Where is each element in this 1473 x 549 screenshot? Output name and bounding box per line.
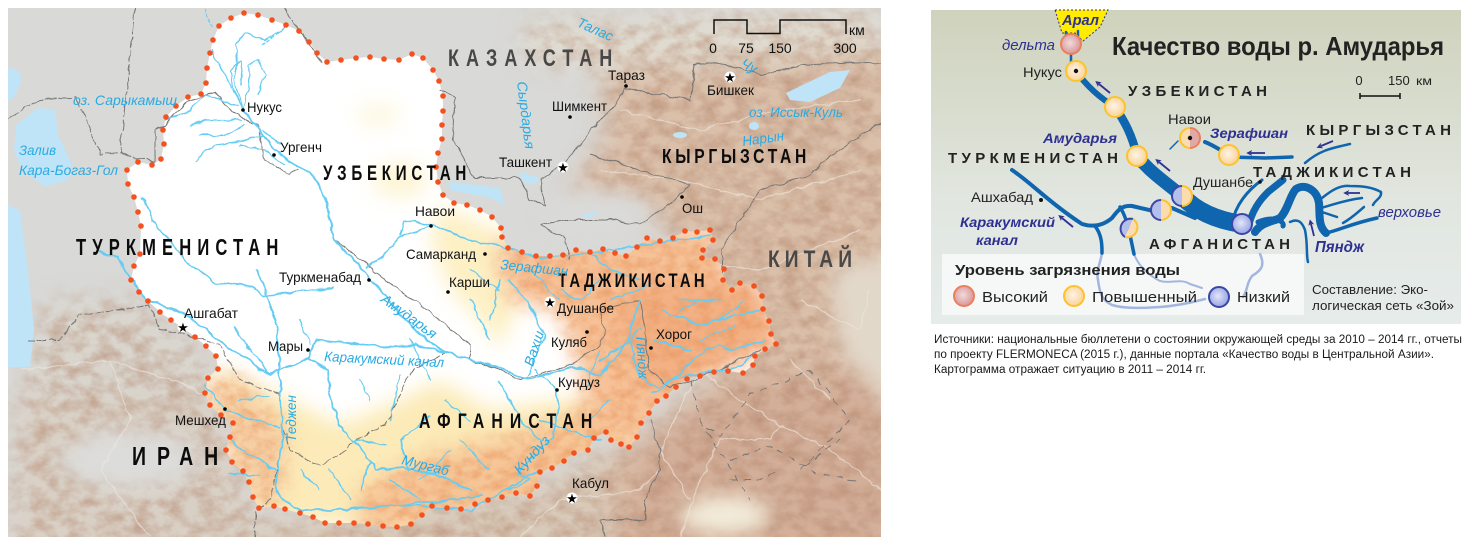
panel: water quality schematic bbox=[931, 10, 1461, 324]
capital city stars: ★ bbox=[724, 70, 736, 85]
schematic place labels: Арал bbox=[1061, 12, 1100, 29]
capital city stars: ★ bbox=[566, 491, 578, 506]
country labels on the map: АФГАНИСТАН bbox=[419, 409, 592, 433]
country labels on the map: УЗБЕКИСТАН bbox=[323, 160, 466, 185]
city labels: Самарканд bbox=[406, 246, 476, 262]
schematic scale bar: 0 bbox=[1355, 73, 1363, 88]
country labels on the map bbox=[76, 46, 852, 471]
schematic place labels: Каракумский bbox=[960, 214, 1055, 230]
basin area tinted by elevation bbox=[127, 14, 775, 527]
country labels on the map: ИРАН bbox=[132, 441, 218, 471]
credit: compiled by Zoi Environment Network: логическая сеть «Зой» bbox=[1312, 299, 1454, 313]
schematic place labels: УЗБЕКИСТАН bbox=[1128, 83, 1267, 100]
river and lake labels: Кара-Богаз-Гол bbox=[19, 162, 118, 178]
river and lake labels: Талас bbox=[575, 14, 616, 44]
legend: pollution level: Уровень загрязнения воды bbox=[955, 262, 1180, 279]
schematic place labels: Навои bbox=[1168, 111, 1211, 127]
schematic place labels: Амударья bbox=[1042, 130, 1117, 146]
river and lake labels: оз. Сарыкамыш bbox=[73, 92, 177, 108]
schematic scale bar: км bbox=[1416, 74, 1432, 88]
schematic place labels: ТАДЖИКИСТАН bbox=[1253, 164, 1411, 181]
city labels: Куляб bbox=[551, 334, 587, 350]
map scale bar: км bbox=[849, 22, 865, 38]
sources note: Источники: национальные бюллетени о состоянии окружающей среды за 2010 – 2014 гг., отчеты bbox=[934, 334, 1462, 346]
river and lake labels: Кундуз bbox=[510, 432, 553, 477]
river and lake labels: Чу bbox=[738, 55, 761, 77]
river and lake labels bbox=[19, 14, 843, 479]
schematic place labels: АФГАНИСТАН bbox=[1149, 236, 1290, 253]
map scale bar: 150 bbox=[768, 40, 792, 56]
surrounding terrain relief bbox=[8, 8, 900, 549]
city labels: Ош bbox=[682, 200, 703, 216]
flow direction arrows bbox=[1062, 84, 1360, 236]
country labels on the map: ТУРКМЕНИСТАН bbox=[76, 235, 278, 261]
legend box background bbox=[942, 254, 1304, 315]
water bodies: Caspian, Kara-Bogaz-Gol and mountain lakes bbox=[8, 68, 850, 367]
sources note: по проекту FLERMONECA (2015 г.), данные портала «Качество воды в Центральной Азии». bbox=[934, 349, 1434, 361]
city labels: Навои bbox=[415, 203, 455, 219]
country labels on the map: КАЗАХСТАН bbox=[448, 46, 612, 72]
schematic place labels: Нукус bbox=[1023, 64, 1062, 80]
map scale bar bbox=[709, 20, 865, 56]
river and lake labels: Пяндж bbox=[633, 336, 652, 380]
city labels: Шимкент bbox=[552, 98, 608, 114]
city labels: Хорог bbox=[656, 326, 692, 342]
city labels: Мары bbox=[268, 338, 303, 354]
schematic place labels: Ашхабад bbox=[971, 189, 1033, 205]
river and lake labels: Каракумский канал bbox=[324, 348, 445, 370]
monitoring points coloured by pollution level bbox=[1039, 34, 1262, 237]
schematic place labels: верховье bbox=[1378, 204, 1441, 221]
sources note bbox=[934, 334, 1462, 376]
river and lake labels: Мургаб bbox=[400, 451, 452, 479]
city labels: Нукус bbox=[247, 99, 282, 115]
river and lake labels: Вахш bbox=[521, 328, 547, 368]
city labels: Ашгабат bbox=[184, 305, 239, 321]
country labels on the map: КЫРГЫЗСТАН bbox=[662, 145, 806, 167]
river and lake labels: Нарын bbox=[741, 127, 785, 149]
country borders bbox=[8, 8, 881, 537]
Aral Sea in yellow bbox=[1055, 10, 1108, 41]
title: Качество воды р. Амударья bbox=[1112, 31, 1444, 61]
river and lake labels: Сырдарья bbox=[514, 80, 538, 150]
city labels: Бишкек bbox=[707, 82, 755, 98]
river and lake labels: Залив bbox=[19, 142, 56, 158]
city labels: Мешхед bbox=[175, 412, 226, 428]
map scale bar: 0 bbox=[709, 40, 717, 56]
city labels: Ургенч bbox=[280, 139, 322, 155]
legend: pollution level: Низкий bbox=[1237, 289, 1290, 306]
legend: pollution level bbox=[954, 262, 1290, 307]
schematic place labels: Пяндж bbox=[1315, 239, 1365, 256]
capital city stars: ★ bbox=[177, 320, 189, 335]
schematic place labels bbox=[948, 12, 1451, 256]
legend: pollution level: Высокий bbox=[982, 289, 1048, 306]
city markers bbox=[223, 84, 684, 411]
capital city stars bbox=[177, 70, 736, 506]
city labels: Ташкент bbox=[499, 154, 553, 170]
schematic place labels: дельта bbox=[1002, 37, 1055, 54]
schematic place labels: КЫРГЫЗСТАН bbox=[1306, 122, 1451, 139]
capital city stars: ★ bbox=[544, 295, 556, 310]
schematic place labels: ТУРКМЕНИСТАН bbox=[948, 150, 1118, 167]
credit: compiled by Zoi Environment Network bbox=[1312, 283, 1454, 313]
sources note: Картограмма отражает ситуацию в 2011 – 2014 гг. bbox=[934, 364, 1206, 376]
schematic place labels: Зерафшан bbox=[1210, 125, 1289, 141]
city labels: Кундуз bbox=[558, 374, 600, 390]
city labels: Кабул bbox=[572, 475, 609, 491]
river and lake labels: оз. Иссык-Куль bbox=[749, 104, 843, 120]
valleys in the surrounding relief bbox=[20, 100, 881, 537]
city labels: Карши bbox=[449, 274, 490, 290]
river and lake labels: Амударья bbox=[377, 290, 441, 342]
river network scheme bbox=[1012, 31, 1381, 308]
rivers: Amu Darya, canals, tributaries bbox=[100, 8, 765, 510]
map scale bar: 75 bbox=[738, 40, 754, 56]
river and lake labels: Зерафшан bbox=[500, 256, 569, 279]
city labels: Душанбе bbox=[557, 300, 614, 316]
capital city stars: ★ bbox=[557, 160, 569, 175]
schematic place labels: канал bbox=[976, 232, 1018, 248]
city labels: Туркменабад bbox=[279, 269, 361, 285]
schematic place labels: Душанбе bbox=[1193, 174, 1253, 190]
legend: pollution level: Повышенный bbox=[1092, 289, 1197, 306]
basin boundary: orange dotted line bbox=[124, 10, 779, 530]
river and lake labels: Теджен bbox=[283, 395, 299, 442]
schematic scale bar: 150 bbox=[1388, 73, 1410, 88]
city labels bbox=[175, 67, 755, 491]
map scale bar: 300 bbox=[833, 40, 857, 56]
schematic scale bar bbox=[1355, 73, 1432, 99]
country labels on the map: ТАДЖИКИСТАН bbox=[558, 270, 705, 291]
credit: compiled by Zoi Environment Network: Составление: Эко- bbox=[1312, 283, 1428, 297]
panel: relief map of the Amu Darya basin bbox=[8, 0, 900, 549]
city labels: Тараз bbox=[608, 67, 645, 83]
country labels on the map: КИТАЙ bbox=[768, 245, 852, 273]
